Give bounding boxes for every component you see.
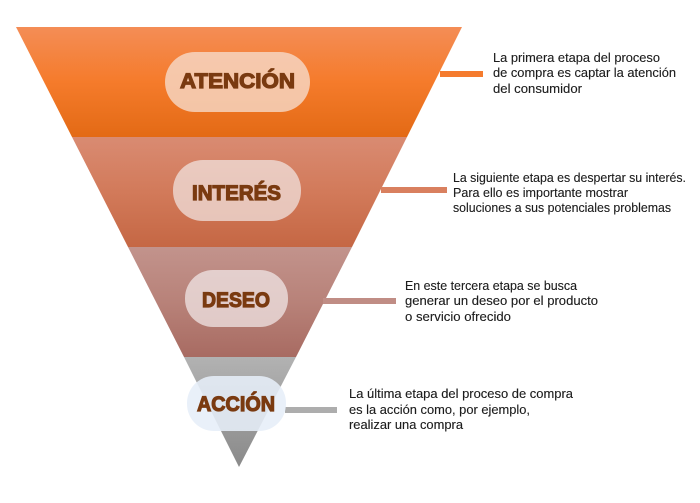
label pill: Acción: [187, 376, 286, 431]
heading: Interés: INTERÉS: [192, 180, 281, 205]
description: Interés: La siguiente etapa es despertar su interés.: [453, 171, 686, 185]
connector: Interés: [381, 187, 447, 193]
description: Acción: [349, 387, 573, 432]
description: Atención: La primera etapa del proceso: [493, 51, 660, 65]
description: Interés: Para ello es importante mostrar: [453, 186, 628, 200]
description: Acción: realizar una compra: [349, 418, 463, 432]
stage: Interés: [72, 137, 686, 247]
heading: Deseo: DESEO: [202, 288, 270, 312]
description: Acción: La última etapa del proceso de compra: [349, 387, 573, 401]
funnel band: Interés: [72, 137, 407, 247]
label pill: Interés: [173, 160, 301, 221]
heading: Atención: ATENCIÓN: [180, 68, 295, 93]
description: Acción: es la acción como, por ejemplo,: [349, 403, 530, 417]
stage: Atención: [16, 27, 676, 137]
description: Deseo: [405, 279, 598, 324]
description: Atención: del consumidor: [493, 82, 582, 96]
description: Interés: soluciones a sus potenciales problemas: [453, 201, 671, 215]
funnel band: Atención: [16, 27, 462, 137]
stage: Acción: [184, 357, 573, 467]
description: Interés: [453, 171, 686, 215]
funnel band: Deseo: [128, 247, 352, 357]
connector: Acción: [285, 407, 337, 413]
stage: Deseo: [128, 247, 598, 357]
description: Deseo: o servicio ofrecido: [405, 310, 511, 324]
heading: Acción: ACCIÓN: [197, 391, 275, 416]
funnel band: Acción: [184, 357, 296, 467]
label pill: Atención: [165, 52, 310, 112]
connector: Deseo: [323, 298, 396, 304]
description: Atención: de compra es captar la atención: [493, 66, 676, 80]
description: Deseo: En este tercera etapa se busca: [405, 279, 577, 293]
connector: Atención: [440, 71, 483, 77]
description: Atención: [493, 51, 676, 96]
label pill: Deseo: [185, 270, 288, 327]
description: Deseo: generar un deseo por el producto: [405, 294, 598, 308]
